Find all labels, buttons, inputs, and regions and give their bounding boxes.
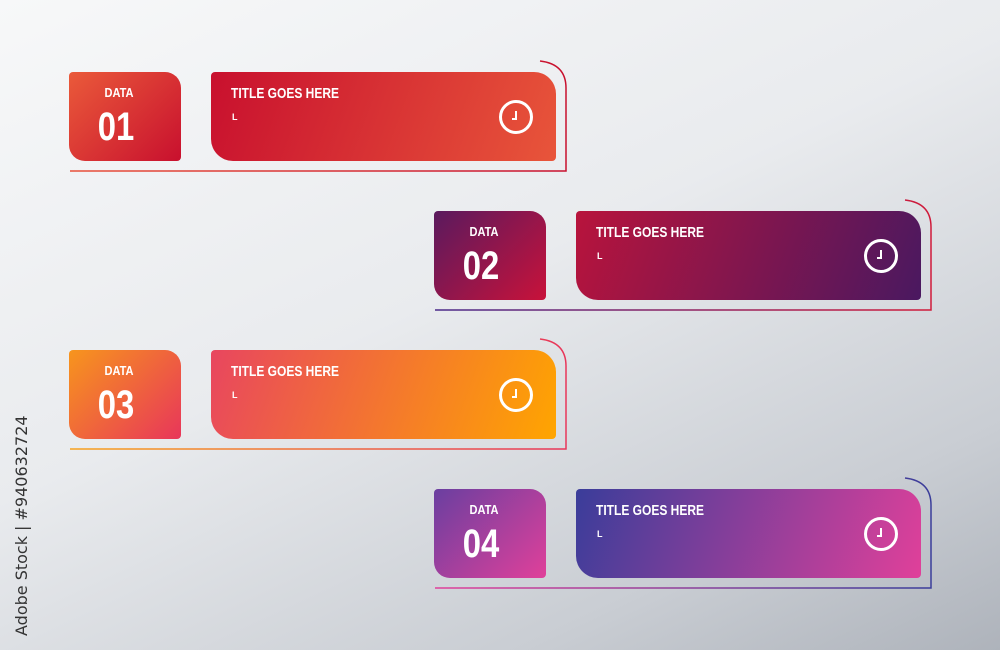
row 3 number box — [69, 350, 181, 439]
row 4 number box: DATA — [469, 502, 499, 517]
row 3 title box: L — [232, 390, 238, 400]
row 4 number box: 04 — [463, 522, 499, 566]
row 1 number box: DATA — [104, 85, 134, 100]
row 1 title box — [211, 72, 556, 161]
row 4 title box: L — [597, 529, 602, 539]
row 3 number box: 03 — [98, 383, 134, 427]
row 2 title box: TITLE GOES HERE — [596, 224, 704, 241]
row 2 number box: 02 — [463, 244, 499, 288]
row 1 number box: 01 — [98, 105, 134, 149]
watermark id: Adobe Stock | #940632724 — [12, 415, 31, 636]
row 1 number box — [69, 72, 181, 161]
row 3 title box — [211, 350, 556, 439]
row 3 title box: TITLE GOES HERE — [231, 363, 339, 380]
row 2 number box — [434, 211, 546, 300]
row 2 title box: L — [597, 251, 602, 261]
row 4 title box — [576, 489, 921, 578]
row 4 title box: TITLE GOES HERE — [596, 502, 704, 519]
row 2 title box — [576, 211, 921, 300]
row 3 number box: DATA — [104, 363, 134, 378]
row 2 number box: DATA — [469, 224, 499, 239]
row 4 number box — [434, 489, 546, 578]
row 1 title box: L — [232, 112, 238, 122]
row 1 title box: TITLE GOES HERE — [231, 85, 339, 102]
